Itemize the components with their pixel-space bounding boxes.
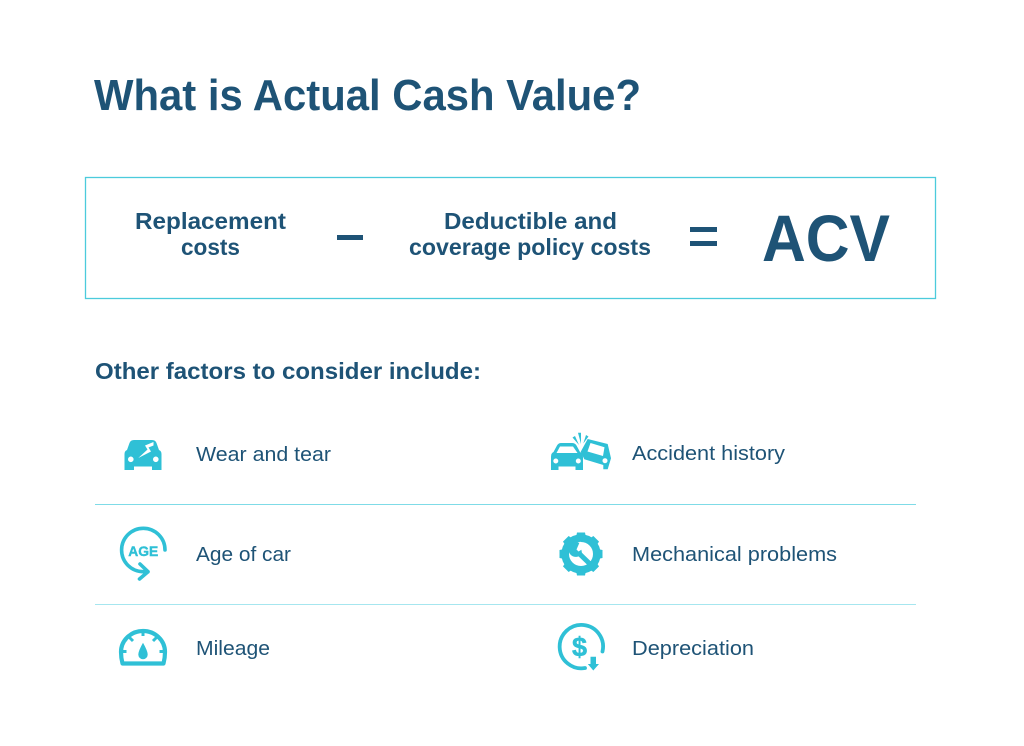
factor: mechanical problems — [560, 532, 837, 576]
label: Accident history — [632, 442, 786, 465]
factor: accident history — [551, 433, 786, 470]
row divider 1 — [95, 504, 916, 505]
label: Mileage — [196, 637, 270, 660]
label: Depreciation — [632, 637, 754, 660]
row divider 2 — [95, 604, 916, 605]
title: What is Actual Cash Value? — [94, 71, 641, 120]
formula term: replacement costs: costs — [181, 234, 240, 260]
factor: depreciation — [560, 625, 754, 670]
icon: age arrow: AGE — [128, 544, 158, 559]
formula term: deductible and coverage policy costs: coverage policy costs — [409, 234, 651, 260]
icon: damaged car — [124, 440, 162, 470]
formula term: deductible and coverage policy costs — [409, 208, 651, 260]
label: Age of car — [196, 543, 291, 566]
factor: wear and tear — [124, 440, 331, 470]
minus sign — [337, 235, 363, 240]
formula term: deductible and coverage policy costs: Deductible and — [444, 208, 617, 234]
label: Wear and tear — [196, 443, 331, 466]
factor: mileage — [121, 630, 270, 664]
factor: age of car — [122, 528, 291, 579]
label: Mechanical problems — [632, 543, 837, 566]
equals sign — [690, 227, 717, 246]
icon: car collision — [551, 433, 611, 470]
ACV result: ACV — [762, 201, 890, 275]
icon: dollar with down arrow: $ — [572, 632, 587, 662]
icon: dollar with down arrow — [560, 625, 603, 670]
formula term: replacement costs — [135, 208, 286, 260]
wrench — [569, 542, 590, 564]
subheading: Other factors to consider include: — [95, 358, 481, 384]
icon: gear and wrench — [560, 532, 602, 576]
icon: age arrow — [122, 528, 165, 579]
panel: formula — [86, 178, 936, 298]
icon: fuel gauge — [121, 630, 165, 664]
gear teeth — [560, 532, 602, 576]
formula term: replacement costs: Replacement — [135, 208, 286, 234]
